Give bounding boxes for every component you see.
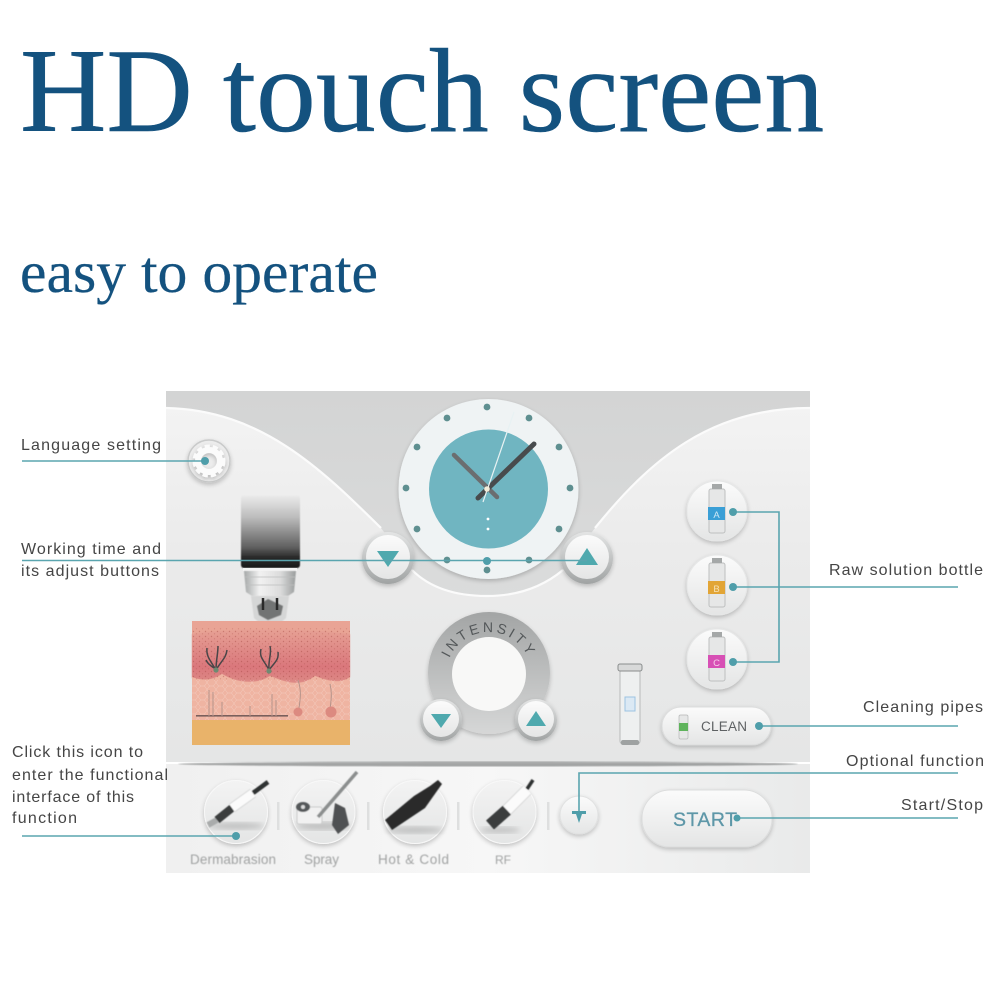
bottle button A: [687, 481, 747, 541]
handpiece: [241, 495, 300, 625]
function button: Hot and Cold: [378, 780, 449, 867]
label: adjust buttons: its adjust buttons: [21, 563, 159, 580]
function button: Dermabrasion: Dermabrasion: [190, 852, 276, 867]
callout dots: [201, 457, 763, 840]
function button: Hot and Cold: Hot & Cold: [378, 852, 449, 867]
skin illustration: [192, 621, 350, 745]
label: language setting: Language setting: [21, 437, 161, 454]
bottle button B: [687, 555, 747, 615]
label: optional function: Optional function: [846, 753, 984, 770]
button: intensity down: [420, 699, 462, 741]
clock: [398, 399, 578, 579]
button: start: START: [673, 809, 737, 831]
subtitle: easy to operate: [20, 239, 378, 305]
bottle button A: A: [713, 510, 720, 521]
function button: RF: RF: [495, 853, 511, 867]
function button: RF: [473, 780, 536, 867]
lower screen area: [166, 408, 810, 762]
label: start stop: Start/Stop: [901, 797, 983, 814]
button: intensity up: [515, 699, 557, 741]
label: working time: Working time and: [21, 541, 161, 558]
panel: touch screen interface: [166, 391, 810, 762]
button: optional function: [560, 796, 598, 834]
callout lines: [22, 461, 958, 836]
label: click icon instructions: Click this icon to: [12, 744, 143, 761]
label: click icon instructions: [12, 744, 168, 827]
bottle button B: B: [713, 584, 720, 595]
clean button: [662, 707, 771, 745]
button: start: [642, 790, 772, 847]
intensity dial: [426, 612, 552, 738]
icon: settings gear: [188, 440, 230, 482]
label: click icon instructions: enter the functional: [12, 767, 168, 784]
icon: waste bottle: [618, 664, 642, 745]
bottle button C: [687, 629, 747, 689]
function button: Spray: [292, 772, 357, 867]
function button: Dermabrasion: [190, 780, 276, 867]
intensity dial: INTENSITY: [441, 622, 536, 657]
bottle button C: C: [713, 658, 720, 669]
hair follicles: [206, 646, 278, 670]
function button: Spray: Spray: [304, 852, 339, 867]
button: time up: [561, 532, 613, 584]
label: click icon instructions: function: [12, 810, 77, 827]
curve line: [166, 408, 810, 596]
separators: [277, 802, 550, 830]
label: click icon instructions: interface of this: [12, 789, 134, 806]
button: time down: [362, 532, 414, 584]
label: cleaning pipes: Cleaning pipes: [863, 699, 983, 716]
panel: function strip: [166, 762, 810, 873]
label: raw solution bottle: Raw solution bottle: [829, 562, 983, 579]
clean button: CLEAN: [701, 719, 747, 734]
clock hands: [454, 412, 534, 502]
title: HD touch screen: [20, 24, 824, 157]
